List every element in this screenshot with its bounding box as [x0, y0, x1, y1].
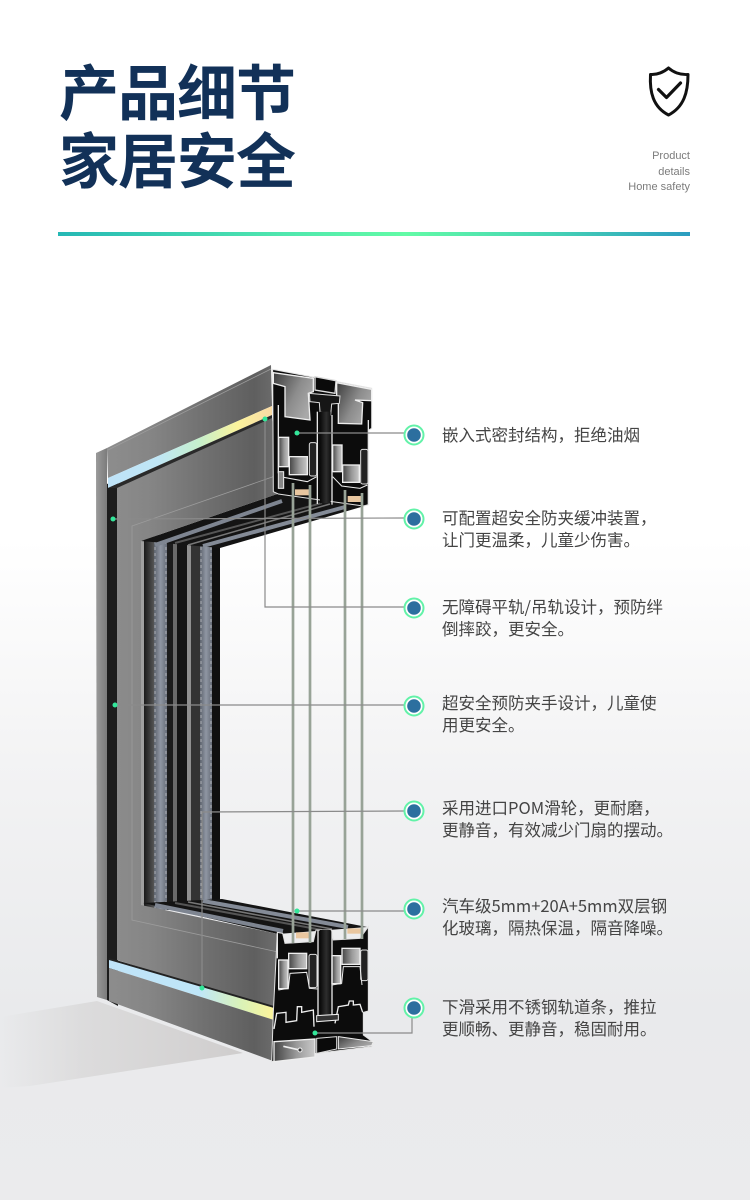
subtitle: english caption: Home safety	[628, 181, 690, 193]
frame: main face	[117, 417, 280, 1009]
subtitle: english caption: Product	[652, 150, 690, 162]
bottom profile cross-section	[272, 927, 373, 1062]
frame: outer left strip	[96, 448, 107, 1000]
callout text 3: 无障碍平轨/吊轨设计，预防绊	[442, 594, 663, 618]
title: line one: 产品细节	[59, 61, 295, 128]
callout text 1: 嵌入式密封结构，拒绝油烟	[442, 422, 640, 446]
bottom rail top surface	[143, 899, 367, 934]
glass panes	[293, 483, 362, 943]
callout text 5: 更静音，有效减少门扇的摆动。	[442, 817, 673, 841]
callout text 4	[442, 690, 656, 736]
subtitle: english caption	[628, 150, 690, 193]
top profile cross-section	[273, 369, 372, 506]
frame: dark reveal	[107, 480, 118, 1006]
callout markers	[404, 426, 424, 1018]
leader dots	[110, 416, 318, 1036]
frame: upper colour strip	[108, 406, 272, 488]
callout text 2: 可配置超安全防夹缓冲装置，	[442, 505, 656, 529]
callout text 6	[442, 893, 673, 939]
frame: lower face	[109, 968, 274, 1061]
icon: shield with check	[648, 66, 690, 116]
frame: top shadow under strip	[108, 415, 272, 488]
callout text 5: 采用进口POM滑轮，更耐磨，	[442, 795, 660, 819]
callout text 3	[442, 594, 663, 640]
callout text 4: 用更安全。	[442, 712, 524, 736]
floor shadow	[0, 1001, 243, 1088]
gradient divider bar	[58, 232, 690, 236]
callout text 7: 更顺畅、更静音，稳固耐用。	[442, 1016, 656, 1040]
leader lines	[113, 419, 412, 1033]
frame: lower colour strip	[109, 960, 274, 1020]
frame: bottom shadow line	[109, 958, 274, 1009]
callout text 6: 汽车级5mm+20A+5mm双层钢	[442, 893, 667, 917]
callout text 2: 让门更温柔，儿童少伤害。	[442, 527, 640, 551]
frame: upper face	[107, 365, 272, 478]
top rail underside	[141, 493, 368, 548]
callout text 4: 超安全预防夹手设计，儿童使	[442, 690, 656, 714]
interior columns	[141, 535, 220, 910]
callout text 7: 下滑采用不锈钢轨道条，推拉	[442, 994, 656, 1018]
callout text 7	[442, 994, 656, 1040]
title: line two: 家居安全	[59, 129, 295, 196]
subtitle: english caption: details	[658, 166, 690, 178]
frame: engraved lines	[108, 369, 278, 952]
callout text 3: 倒摔跤，更安全。	[442, 616, 574, 640]
callout text 2	[442, 505, 656, 551]
callout text 6: 化玻璃，隔热保温，隔音降噪。	[442, 915, 673, 939]
callout text 5	[442, 795, 673, 841]
